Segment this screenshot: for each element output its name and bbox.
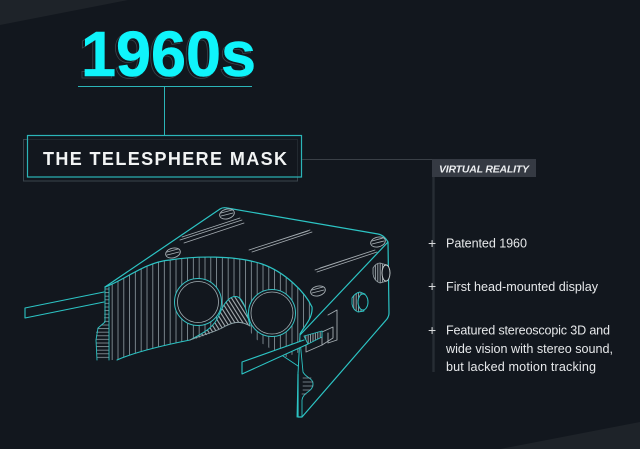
left flange [96, 287, 109, 360]
bullet: patented: Patented 1960 [446, 236, 527, 250]
tag: Virtual Reality [432, 159, 536, 177]
bullet list [428, 235, 613, 374]
title: 1960s: 1960s [81, 18, 256, 90]
knobs [352, 263, 390, 312]
bullet: features: but lacked motion tracking [446, 360, 596, 374]
bullet: features: wide vision with stereo sound, [445, 342, 613, 356]
left strap [25, 292, 104, 318]
title connector [78, 86, 252, 135]
nose hatching [190, 297, 250, 340]
left band hatching [96, 287, 109, 360]
right strap [242, 340, 308, 374]
bullet: first HMD: + [428, 278, 436, 294]
bullet: features: + [428, 322, 436, 338]
illustration: Telesphere mask headset [25, 207, 390, 417]
mask hatching [105, 257, 312, 360]
hood engraved lines [180, 218, 377, 272]
headset body outline [105, 208, 389, 417]
bullet: features [428, 322, 613, 374]
title: 1960s: 1960s [78, 20, 254, 92]
tag: Virtual Reality: VIRTUAL REALITY [439, 164, 530, 176]
mask outline [105, 257, 312, 334]
screws [165, 207, 386, 298]
bullet: features: Featured stereoscopic 3D and [446, 324, 610, 338]
bullet: patented: + [428, 235, 436, 251]
bullet: first HMD: First head-mounted display [446, 280, 599, 294]
lenses [174, 278, 296, 336]
connector line to tag [302, 160, 434, 372]
right flange [297, 340, 313, 417]
strap clip [306, 310, 337, 352]
heading box: The Telesphere Mask [24, 136, 302, 181]
heading box: The Telesphere Mask: THE TELESPHERE MASK [43, 149, 287, 169]
